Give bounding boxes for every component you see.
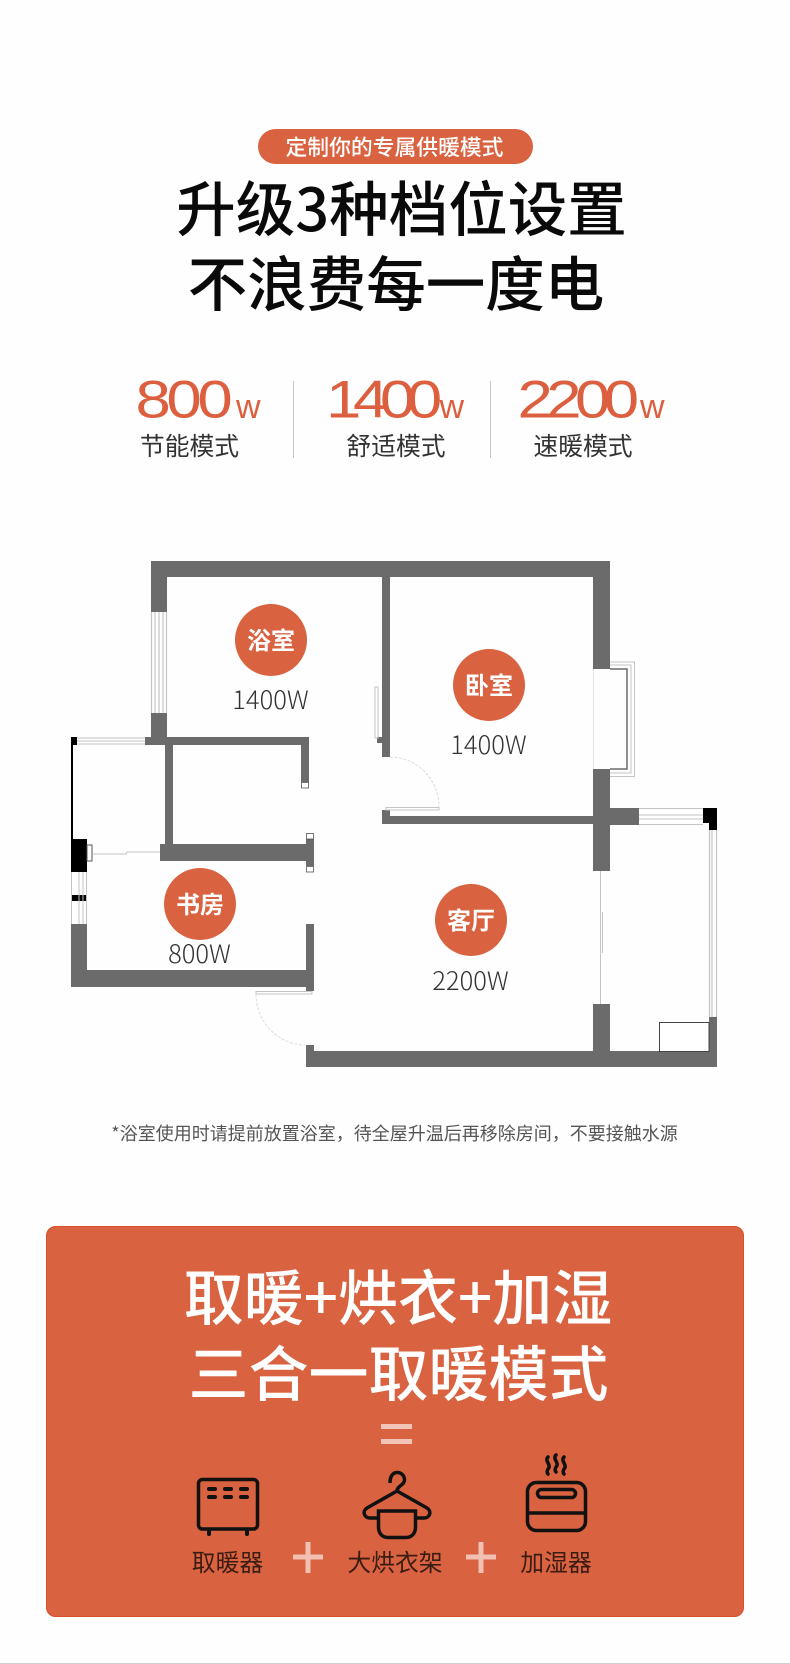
- panel heading: 三合一取暖模式: [188, 1327, 608, 1414]
- room: bathroom: [232, 604, 309, 717]
- room: living room: 客厅: [447, 901, 495, 936]
- footnote: *浴室使用时请提前放置浴室，待全屋升温后再移除房间，不要接触水源: [111, 1120, 678, 1146]
- panel heading: 取暖+烘衣+加湿: [184, 1251, 612, 1338]
- room: bedroom: 1400W: [450, 725, 527, 762]
- label: heater: 取暖器: [192, 1543, 263, 1578]
- icon: heater: [198, 1480, 258, 1534]
- room: living room: [432, 884, 509, 998]
- label: humidifier: 加湿器: [520, 1543, 592, 1578]
- title: 不浪费每一度电: [188, 238, 604, 324]
- room: study: 书房: [176, 885, 224, 920]
- stat: 2200W fast heat mode: w: [639, 388, 665, 426]
- room: living room: 2200W: [432, 961, 509, 998]
- title: [176, 163, 627, 324]
- plus sign: [293, 1542, 323, 1573]
- stat: 800W eco mode: w: [235, 388, 261, 426]
- stat: 1400W comfort mode: 舒适模式: [346, 427, 446, 463]
- icon: humidifier: [528, 1455, 586, 1530]
- panel heading: [184, 1251, 612, 1414]
- plus sign: [466, 1542, 496, 1573]
- panel: three in one: [46, 1226, 744, 1616]
- icon: drying rack hanger: [364, 1472, 430, 1538]
- stat: 2200W fast heat mode: [518, 370, 665, 463]
- badge: custom heating mode: 定制你的专属供暖模式: [286, 131, 504, 162]
- floor plan: [71, 561, 717, 1067]
- stat: 800W eco mode: 800: [136, 370, 231, 429]
- room: bathroom: 浴室: [247, 621, 295, 656]
- stat: 1400W comfort mode: [326, 370, 464, 463]
- black structural columns: [71, 737, 717, 901]
- power modes row: [136, 370, 665, 463]
- room: study: 800W: [168, 934, 231, 971]
- title: 升级3种档位设置: [176, 163, 627, 249]
- label: drying rack: 大烘衣架: [347, 1543, 443, 1578]
- stat: 1400W comfort mode: 1400: [326, 370, 441, 429]
- room: bathroom: 1400W: [232, 680, 309, 717]
- windows and doors: [72, 612, 716, 1045]
- room: study: [164, 868, 236, 971]
- equals sign: [381, 1424, 412, 1444]
- small white jamb boxes: [302, 782, 314, 872]
- stat: 2200W fast heat mode: 2200: [518, 370, 637, 429]
- stat: 1400W comfort mode: w: [438, 388, 464, 426]
- walls: [71, 561, 717, 1067]
- balcony cabinet: [660, 1022, 709, 1052]
- room: bedroom: 卧室: [465, 666, 513, 701]
- room: bedroom: [450, 649, 527, 762]
- stat: 800W eco mode: [136, 370, 261, 463]
- stat: 800W eco mode: 节能模式: [140, 427, 239, 463]
- stat: 2200W fast heat mode: 速暖模式: [533, 427, 633, 463]
